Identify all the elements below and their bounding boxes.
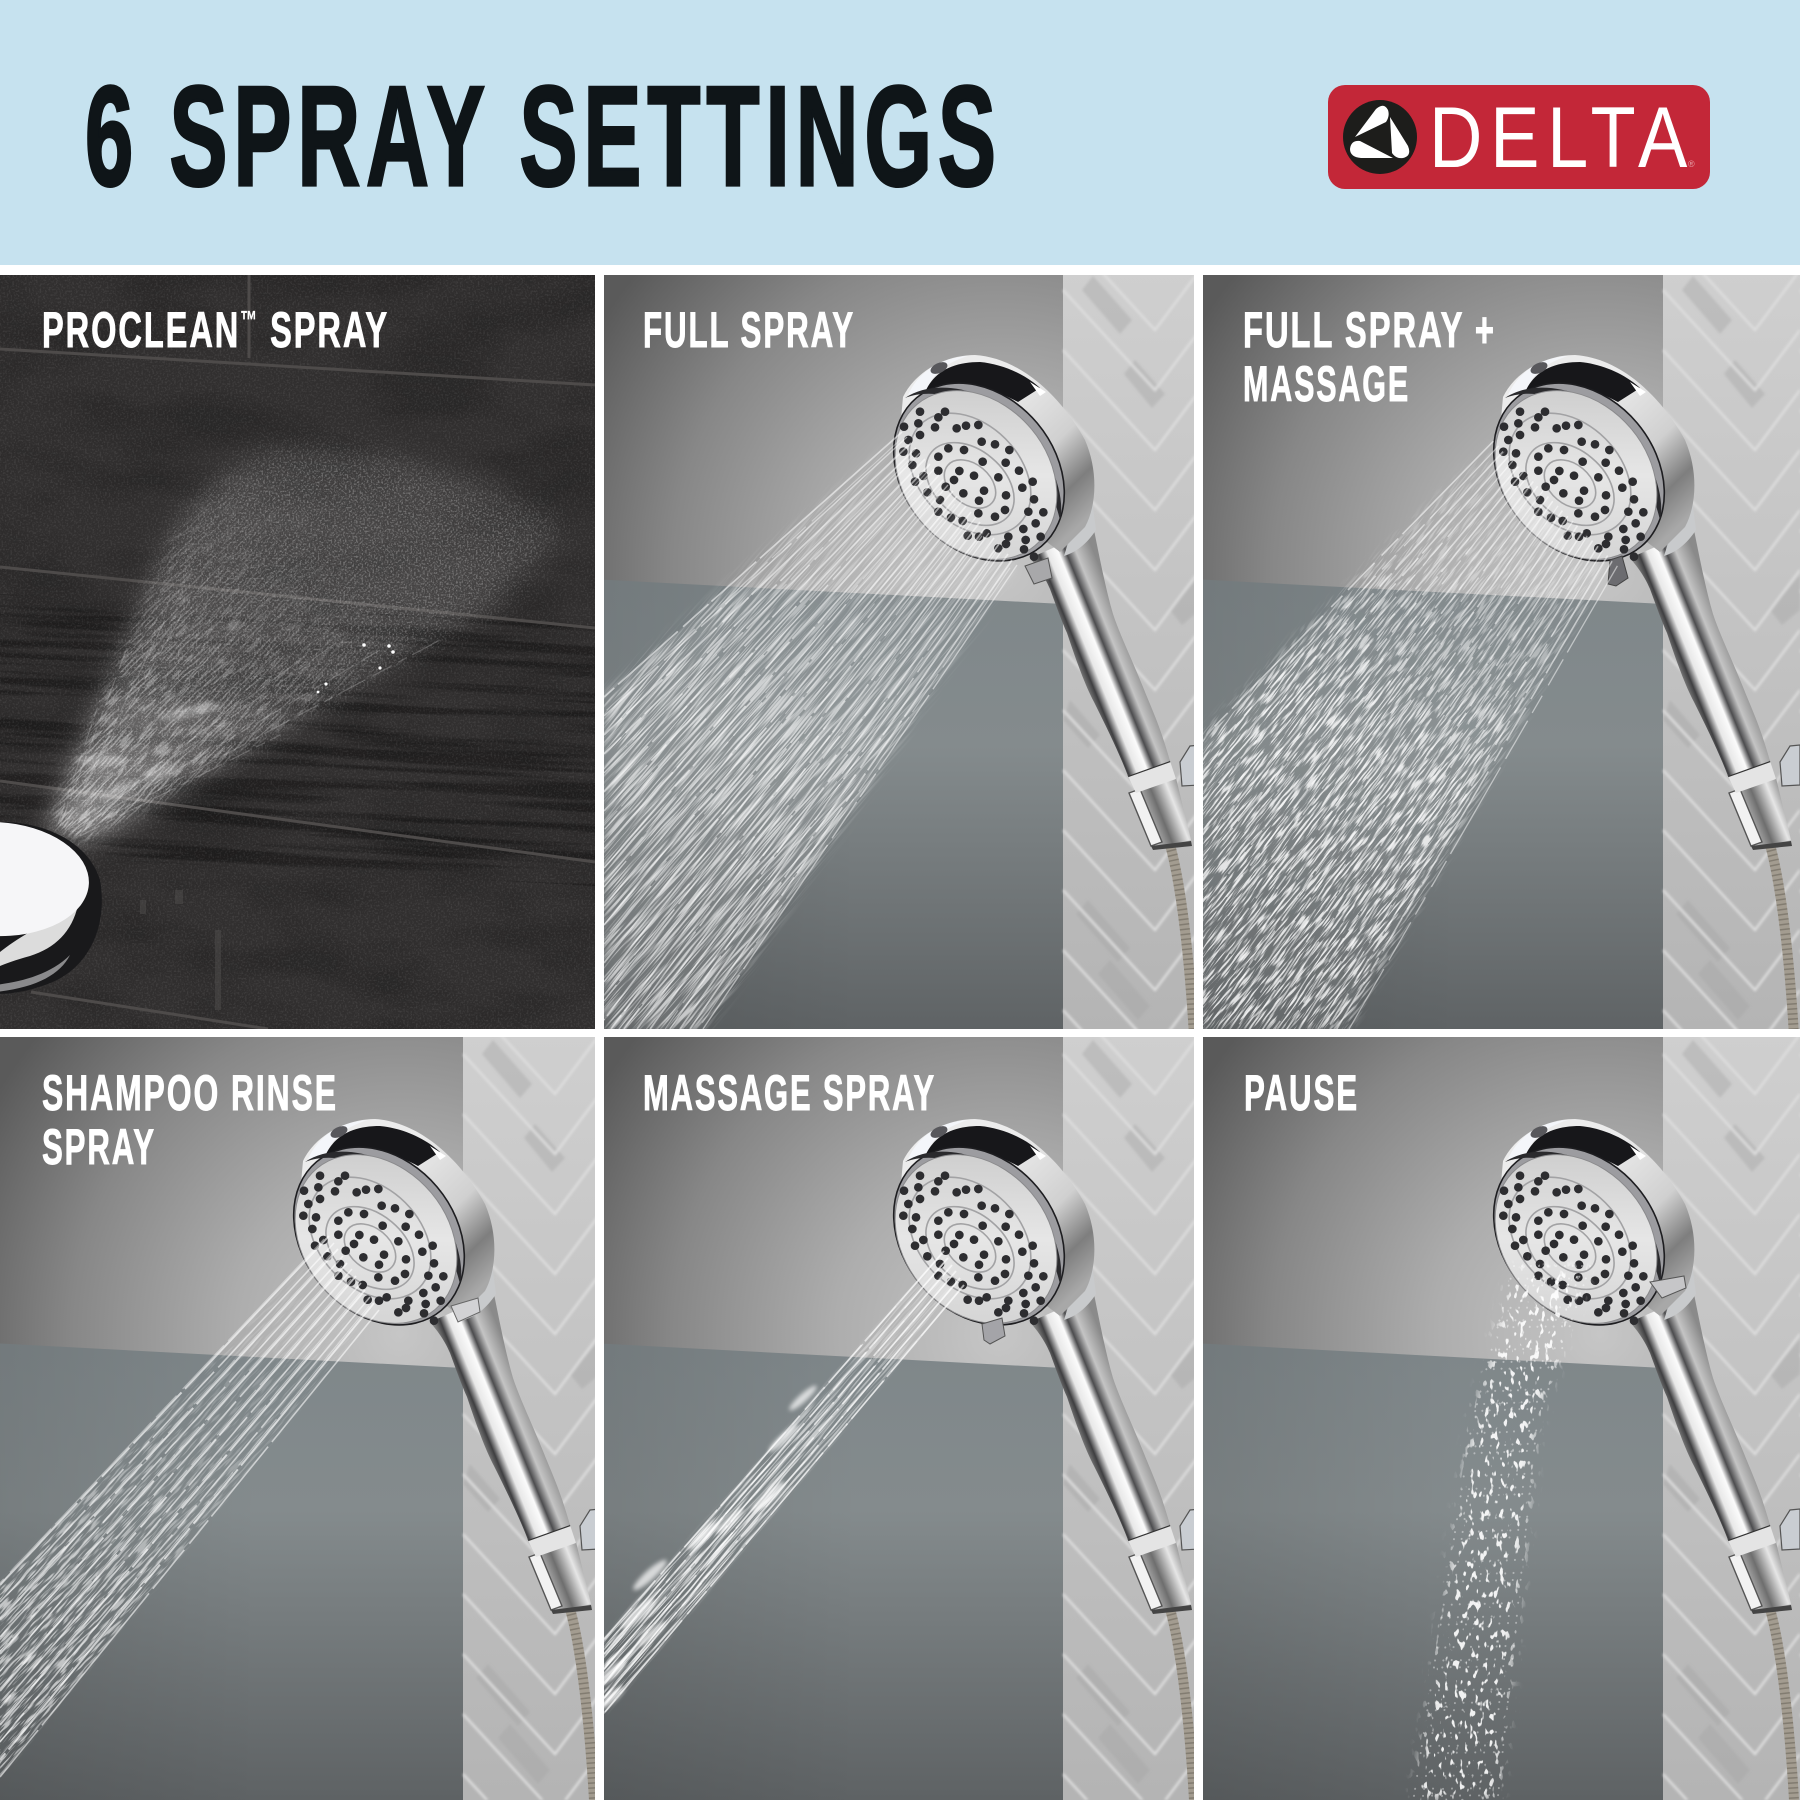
water spray	[604, 432, 1018, 1029]
background	[1190, 268, 1800, 1036]
background	[1190, 1032, 1800, 1800]
background	[590, 1032, 1210, 1800]
background	[590, 268, 1210, 1036]
water spray	[604, 1250, 965, 1714]
registered mark: ®	[1688, 159, 1695, 169]
lever	[451, 1298, 480, 1322]
label: FULL SPRAY	[643, 302, 855, 358]
title: 6 SPRAY SETTINGS	[85, 57, 1002, 216]
logo mark	[1343, 100, 1417, 174]
label: PROCLEAN	[42, 302, 347, 358]
label lines: SHAMPOO RINSE	[42, 1065, 338, 1121]
hand shower	[858, 1113, 1200, 1800]
lever	[1025, 558, 1052, 584]
lever	[1608, 556, 1628, 586]
label line group	[1243, 302, 1496, 412]
label lines	[42, 1065, 338, 1175]
lever	[1650, 1276, 1686, 1298]
background	[0, 1032, 610, 1800]
hand shower	[858, 349, 1200, 1036]
hand shower	[258, 1113, 600, 1800]
water spray	[1203, 440, 1618, 1029]
panel: ProClean spray	[0, 275, 595, 1029]
hand shower	[1458, 1113, 1800, 1800]
hand shower	[1458, 349, 1800, 1036]
spray fan	[36, 435, 568, 856]
water droplets	[1406, 1256, 1594, 1800]
label: PAUSE	[1244, 1065, 1359, 1121]
logo wordmark: DELTA	[1429, 90, 1695, 186]
panel: full spray	[604, 275, 1194, 1029]
hand shower cap	[0, 817, 102, 994]
label line group: MASSAGE	[1243, 356, 1410, 412]
panel: pause	[1203, 1037, 1800, 1800]
lever	[982, 1318, 1005, 1344]
label line group: FULL SPRAY +	[1243, 302, 1496, 358]
panel: shampoo rinse spray	[0, 1037, 595, 1800]
stone wall	[0, 275, 646, 1029]
panel: massage spray	[604, 1037, 1194, 1800]
water spray	[0, 1236, 380, 1778]
panel: full spray + massage	[1203, 275, 1800, 1029]
logo: Delta	[1328, 85, 1710, 189]
label: MASSAGE SPRAY	[643, 1065, 936, 1121]
label: SPRAY	[259, 302, 389, 358]
label: ™	[240, 305, 259, 335]
header band	[0, 0, 1800, 265]
label lines: SPRAY	[42, 1119, 156, 1175]
